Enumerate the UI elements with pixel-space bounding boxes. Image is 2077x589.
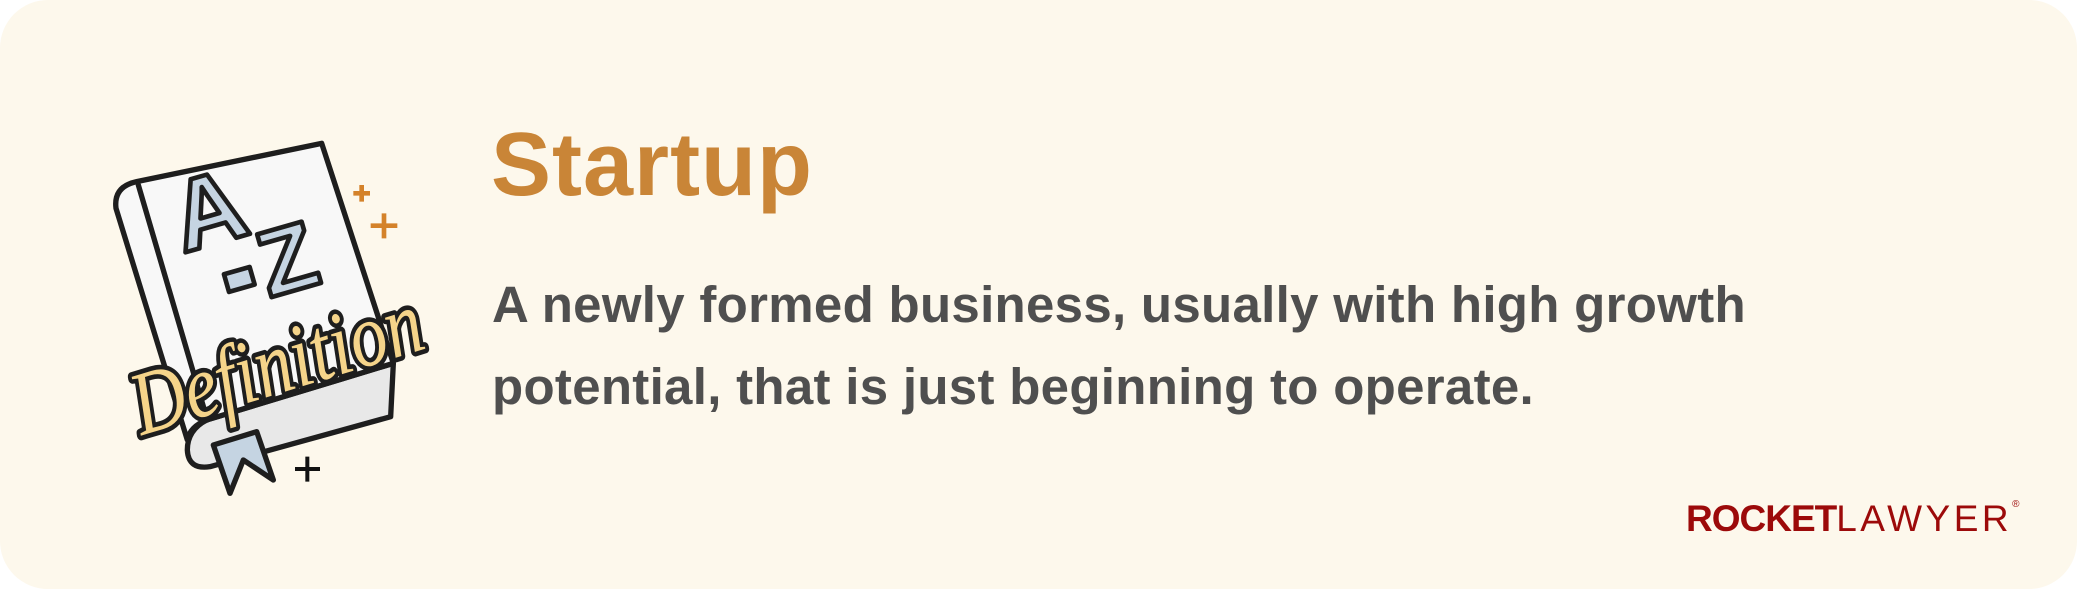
definition text <box>492 276 1746 415</box>
icon: definition book <box>113 140 434 496</box>
letters A-Z: A <box>158 147 259 274</box>
letters A-Z: Z <box>246 201 329 317</box>
definition text: A newly formed business, usually with high growth <box>492 276 1746 333</box>
sparkles <box>353 185 397 238</box>
logo: Rocket Lawyer: ROCKETLAWYER® <box>1686 498 2020 539</box>
book cover <box>116 143 393 440</box>
title: Startup <box>491 115 813 215</box>
bookmark <box>213 432 273 493</box>
letters A-Z <box>158 132 329 336</box>
definition text: potential, that is just beginning to operate. <box>492 358 1534 415</box>
sparkle black <box>295 457 320 482</box>
book pages block <box>187 363 393 467</box>
